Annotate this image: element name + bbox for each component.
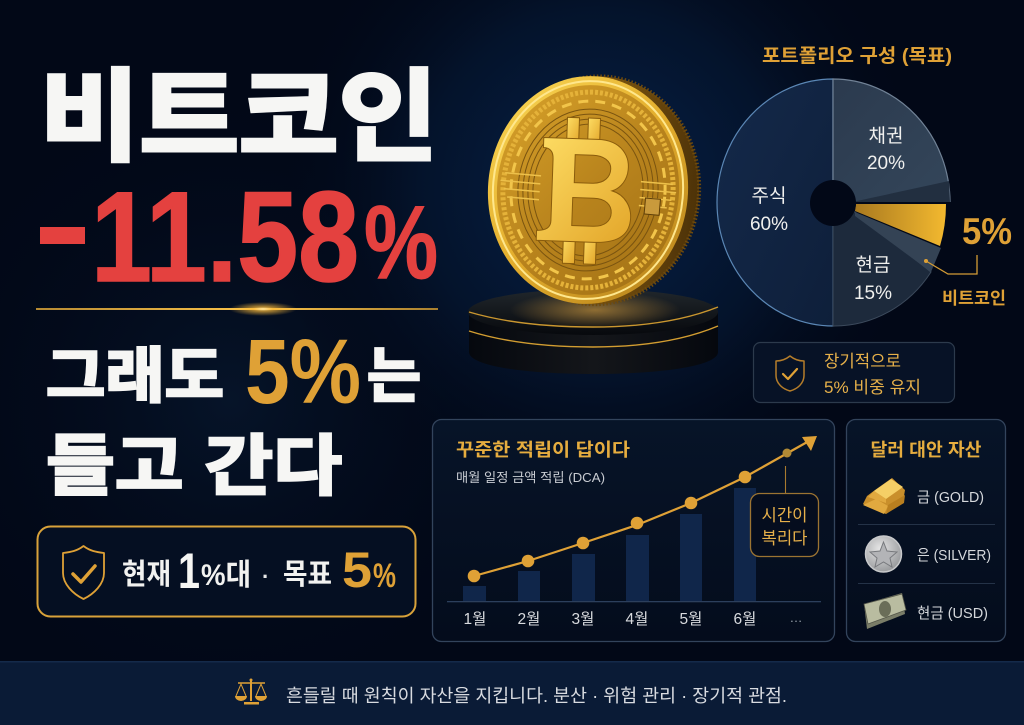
icon: scales (235, 678, 267, 704)
icon: small shield (776, 356, 804, 391)
label: 5% 비트코인: 비트코인 (942, 289, 1006, 308)
label: cash: 현금 (USD) (917, 605, 988, 622)
label: silver: 은 (SILVER) (917, 547, 991, 564)
callout: 현재 1%대 목표 5%: 1 (178, 543, 200, 599)
icon: shield check (63, 546, 104, 599)
icon: bitcoin coin (478, 66, 710, 314)
label: 채권 20%: 20% (867, 153, 905, 174)
headline: -11.58%: % (364, 185, 438, 301)
callout: 시간이 복리다: 시간이 (762, 506, 808, 525)
footer text: 흔들릴 때 원칙이 자산을 지킵니다. 분산 · 위험 관리 · 장기적 관점. (286, 686, 787, 706)
icon: cash stack (864, 593, 906, 629)
label: 5% 비트코인 (924, 211, 1012, 308)
heading: 달러 대안 자산: 달러 대안 자산 (870, 440, 982, 460)
subheading: 그래도 5%는: 는 (367, 343, 421, 410)
callout: 현재 1%대 목표 5% (38, 526, 416, 616)
title: 비트코인: 비트코인 (40, 62, 438, 174)
slice: cash 15% (833, 203, 931, 326)
bitcoin symbol (535, 116, 634, 266)
heading: 꾸준한 적립이 답이다: 꾸준한 적립이 답이다 (456, 440, 630, 460)
pie chart (717, 79, 966, 326)
callout: 현재 1%대 목표 5%: 현재 (122, 558, 171, 591)
label: 현금 15%: 현금 (856, 254, 890, 276)
subheading: 들고 간다: 들고 간다 (46, 429, 342, 503)
callout: 장기적으로 5% 비중 유지 (754, 342, 954, 402)
axis labels: … (790, 610, 802, 625)
axis labels: 4월 (626, 610, 648, 628)
label: 주식 60% (750, 185, 788, 235)
callout: 장기적으로 5% 비중 유지: 5% 비중 유지 (824, 378, 921, 397)
callout: 현재 1%대 목표 5%: 목표 (283, 559, 332, 591)
callout: 현재 1%대 목표 5%: %대 (201, 559, 251, 592)
footer bar (0, 661, 1024, 725)
callout: 현재 1%대 목표 5%: 5 (342, 542, 372, 598)
label: 현금 15%: 15% (854, 283, 892, 304)
axis labels: 6월 (734, 610, 756, 628)
line with arrow (468, 436, 817, 582)
panel: 달러 대안 자산 (846, 420, 1006, 642)
callout: 현재 1%대 목표 5%: % (373, 557, 396, 595)
label: 채권 20% (867, 125, 905, 174)
axis labels: 5월 (680, 610, 702, 628)
label: 주식 60%: 60% (750, 214, 788, 235)
headline: -11.58%: 11.58 (91, 166, 359, 309)
slice: bonds 20% (833, 79, 950, 202)
icon: silver coin (866, 536, 902, 572)
axis labels (464, 610, 802, 628)
subheading: 그래도 5%는: 5% (245, 321, 361, 423)
callout: 시간이 복리다: 복리다 (762, 529, 808, 548)
callout: 시간이 복리다 (750, 466, 818, 556)
subheading: 그래도 5%는 (46, 321, 421, 423)
axis labels: 3월 (572, 610, 594, 628)
axis labels: 2월 (518, 610, 540, 628)
bar chart (463, 488, 756, 601)
label: 채권 20%: 채권 (869, 125, 903, 147)
icon: gold bars (863, 478, 905, 514)
callout: 현재 1%대 목표 5%: · (262, 564, 269, 589)
callout: 장기적으로 5% 비중 유지: 장기적으로 (824, 352, 901, 371)
slice: stocks 60% (717, 79, 833, 326)
podium (468, 289, 718, 374)
label: gold: 금 (GOLD) (917, 489, 984, 506)
heading: 포트폴리오 구성 (목표): 포트폴리오 구성 (목표) (762, 45, 952, 67)
subheading: DCA: 매월 일정 금액 적립 (DCA) (456, 470, 605, 485)
label: 주식 60%: 주식 (752, 185, 786, 207)
divider with spark (36, 302, 438, 316)
label: 현금 15% (854, 254, 892, 304)
subheading: 그래도 5%는: 그래도 (46, 343, 224, 410)
slice: bitcoin 5% (855, 204, 946, 246)
label: 5% 비트코인: 5% (962, 211, 1012, 252)
panel: 꾸준한 적립 chart (432, 420, 834, 642)
axis labels: 1월 (464, 610, 486, 628)
